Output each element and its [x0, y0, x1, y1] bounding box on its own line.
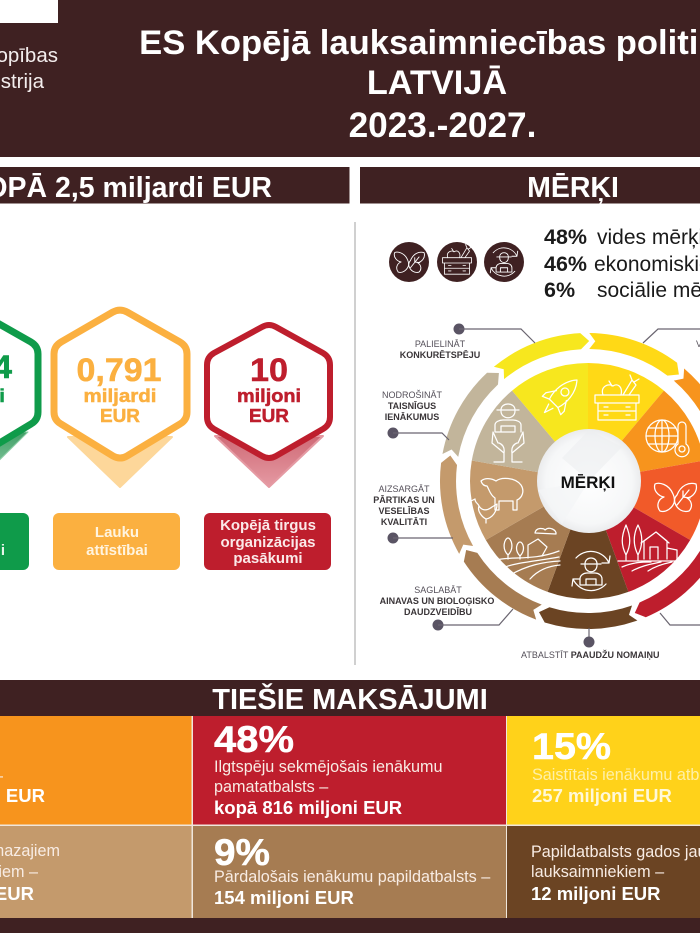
heading: mērķi: MĒRĶI [527, 172, 619, 204]
cell: redistributive support: 154 miljoni EUR [214, 887, 354, 908]
icon: butterfly [655, 483, 696, 512]
objective shares: 46% [544, 252, 587, 276]
callout: competitiveness: PALIELINĀT [415, 339, 466, 349]
heading: direct payments [0, 680, 700, 933]
cell: coupled support: 15% [532, 726, 611, 767]
cell: redistributive support: Pārdalošais ienākumu papildatbalsts – [214, 868, 490, 886]
payment grid backing [0, 716, 700, 918]
title: 2023.-2027. [349, 106, 536, 145]
hexagon: red market measures: 10 [250, 352, 288, 388]
icon: landscape [496, 528, 560, 579]
cell: young farmers [507, 826, 700, 918]
hexagon: orange rural development: miljardi [84, 386, 156, 406]
callout: fair income: IENĀKUMUS [385, 412, 439, 422]
hexagon: red market measures: miljoni [237, 386, 301, 406]
callout: fair income: NODROŠINĀT [382, 390, 442, 400]
header band [0, 0, 700, 157]
callout: food quality: AIZSARGĀT [378, 484, 430, 494]
callout: food quality [373, 484, 453, 544]
callout: fair income: TAISNĪGUS [388, 401, 436, 411]
title: LATVIJĀ [367, 64, 507, 102]
divider [354, 222, 356, 665]
label: market measures: Kopējā tirgus [220, 517, 316, 534]
cell: redistributive support [193, 826, 506, 918]
icon: generational renewal farmer [572, 551, 610, 591]
logo white box [0, 0, 58, 23]
heading: kopā budget [0, 167, 350, 204]
heading: mērķi [360, 167, 700, 204]
label: market measures: organizācijas [220, 534, 316, 551]
callout: landscapes: SAGLABĀT [414, 585, 462, 595]
objective shares [544, 225, 700, 302]
hexagon: red market measures: EUR [249, 406, 289, 426]
callout: climate, cropped [643, 329, 700, 349]
callout: landscapes: DAUDZVEIDĪBU [404, 607, 472, 617]
label: market measures: pasākumi [233, 550, 303, 567]
cell: eco schemes [0, 716, 192, 824]
label: rural development: attīstībai [86, 542, 148, 559]
icon: globe and thermometer [646, 420, 689, 457]
label: market measures [204, 513, 331, 570]
callout: generational renewal [521, 628, 660, 660]
icon: rocket [535, 371, 586, 422]
label: direct payments [0, 513, 29, 570]
cell: coupled support: 257 miljoni EUR [532, 785, 672, 806]
label: rural development: Lauku [95, 524, 139, 541]
wheel centre: MĒRĶI [561, 473, 615, 492]
icon: crate [595, 375, 639, 420]
wheel wedges [470, 363, 700, 599]
outer arrow ring [414, 309, 700, 651]
heading: direct payments: TIEŠIE MAKSĀJUMI [212, 682, 488, 716]
hexagon: orange rural development: EUR [100, 406, 140, 426]
cell: basic income support: kopā 816 miljoni EUR [214, 797, 402, 818]
icon: farmhouse [618, 525, 677, 571]
callout: landscapes [380, 585, 513, 630]
cell: redistributive support: 9% [214, 832, 270, 873]
label: rural development [53, 513, 180, 570]
cell: young farmers: 12 miljoni EUR [531, 883, 661, 904]
wheel centre [537, 429, 641, 533]
cell: basic income support: Ilgtspēju sekmējošais ienākumu [214, 758, 443, 776]
callout: rural areas, cropped [660, 613, 700, 625]
objective shares: 6% [544, 278, 575, 302]
cell: young farmers: lauksaimniekiem – [531, 863, 664, 881]
cell: basic income support: 48% [214, 719, 294, 760]
hexagon: green direct payments [0, 310, 38, 488]
callout: fair income [382, 390, 449, 440]
cell: basic income support: pamatatbalsts – [214, 778, 328, 796]
callout: food quality: KVALITĀTI [381, 517, 427, 527]
objectives icons row [389, 242, 524, 282]
objective shares: 48% [544, 225, 587, 249]
hexagon: red market measures [207, 325, 330, 487]
callout: competitiveness [400, 324, 535, 360]
icon: sheep and hen [471, 478, 523, 523]
logo text [0, 44, 58, 93]
icon: farmer with hands [492, 404, 524, 462]
cell: basic income support [193, 716, 506, 824]
callout: landscapes: AINAVAS UN BIOLOĢISKO [380, 596, 494, 606]
callout: generational renewal: ATBALSTĪT PAAUDŽU NOMAIŅU [521, 649, 660, 660]
hexagon: orange rural development [54, 310, 187, 487]
callout: food quality: VESELĪBAS [378, 506, 430, 516]
hexagon: orange rural development: 0,791 [76, 352, 162, 388]
objectives wheel [414, 309, 700, 651]
cell: coupled support [507, 716, 700, 824]
title [139, 24, 700, 145]
callout: food quality: PĀRTIKAS UN [373, 495, 435, 505]
cell: small farmers [0, 826, 192, 918]
callout: competitiveness: KONKURĒTSPĒJU [400, 350, 480, 360]
